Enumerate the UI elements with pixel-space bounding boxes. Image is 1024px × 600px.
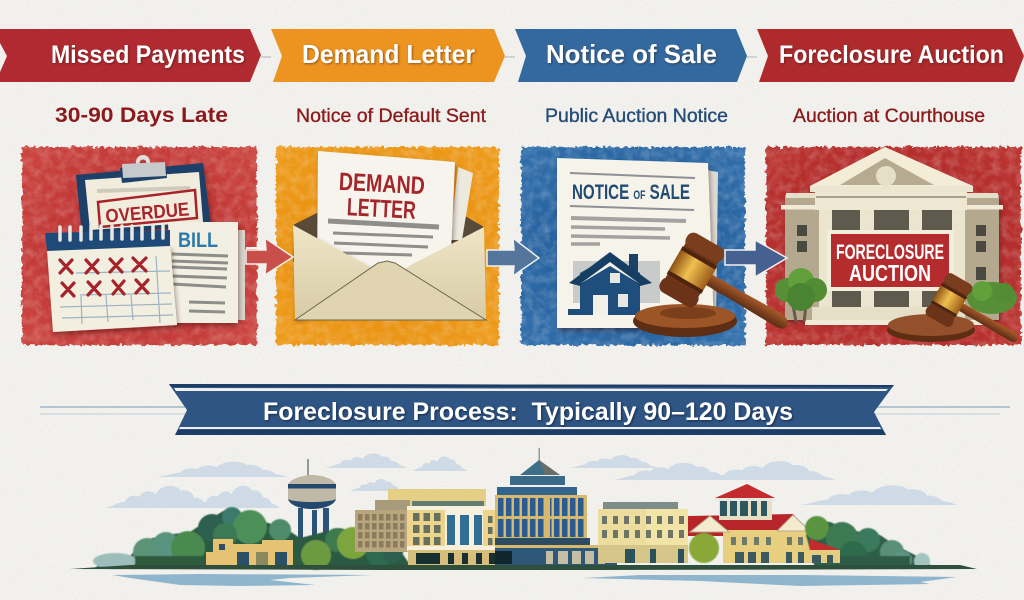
step banner: Notice of Sale: Notice of Sale (546, 39, 717, 69)
ribbon label: Foreclosure Process: Typically 90–120 Days (263, 398, 793, 426)
subheading: Auction at Courthouse: Auction at Courthouse (793, 106, 985, 127)
icon: overdue clipboard (76, 155, 211, 235)
clouds (105, 453, 957, 508)
icon: small gavel (887, 271, 1024, 361)
step banner: Missed Payments: Missed Payments (51, 41, 245, 69)
icon: tree left (775, 268, 827, 322)
timeline ribbon (169, 384, 894, 435)
panel: foreclosure auction illustration (766, 147, 1024, 361)
step banner: Foreclosure Auction (757, 29, 1024, 82)
cream mid-rise building (598, 502, 688, 563)
panel: demand letter illustration (276, 147, 499, 345)
step banner: Foreclosure Auction: Foreclosure Auction (779, 41, 1004, 69)
icon: tree right (967, 281, 1017, 314)
step banner: Missed Payments (0, 29, 261, 82)
icon: gavel (633, 230, 804, 354)
subheading: Notice of Default Sent: Notice of Default Sent (296, 106, 487, 127)
icon: notice document (557, 158, 718, 328)
icon: notice document: NOTICE OF SALE (572, 181, 690, 204)
icon: open envelope with letter: DEMAND (338, 168, 426, 200)
step banner: Demand Letter: Demand Letter (302, 39, 475, 69)
arrow: step 2 to step 3 (487, 238, 539, 276)
icon: bill: BILL (178, 229, 218, 252)
icon: calendar with missed days (45, 225, 177, 332)
main office building (355, 489, 512, 565)
icon: courthouse: FORECLOSURE (836, 241, 944, 264)
icon: overdue clipboard: OVERDUE (105, 199, 190, 228)
left tree line (93, 507, 412, 570)
ground strip (70, 565, 977, 570)
blue glass tower (495, 448, 617, 565)
water tower (288, 459, 336, 540)
icon: courthouse (781, 147, 1003, 325)
panel: missed payments illustration (22, 147, 257, 345)
subheading: 30-90 Days Late: 30-90 Days Late (55, 104, 228, 127)
small yellow building (206, 539, 293, 566)
arrow: step 1 to step 2 (246, 238, 293, 275)
subheading: Public Auction Notice: Public Auction Notice (545, 106, 728, 127)
right tree line (805, 516, 935, 569)
icon: open envelope with letter: LETTER (346, 193, 417, 225)
panel: notice of sale illustration (521, 147, 804, 354)
red-roofed annex (810, 539, 840, 563)
red-roofed civic building (688, 484, 810, 563)
icon: bill (168, 222, 245, 323)
arrow: step 3 to step 4 (725, 240, 787, 277)
water reflections (112, 574, 957, 586)
icon: house (568, 252, 652, 315)
icon: courthouse: AUCTION (849, 260, 931, 286)
step banner: Demand Letter (271, 29, 505, 82)
icon: open envelope with letter (293, 151, 486, 320)
step banner: Notice of Sale (515, 29, 747, 82)
